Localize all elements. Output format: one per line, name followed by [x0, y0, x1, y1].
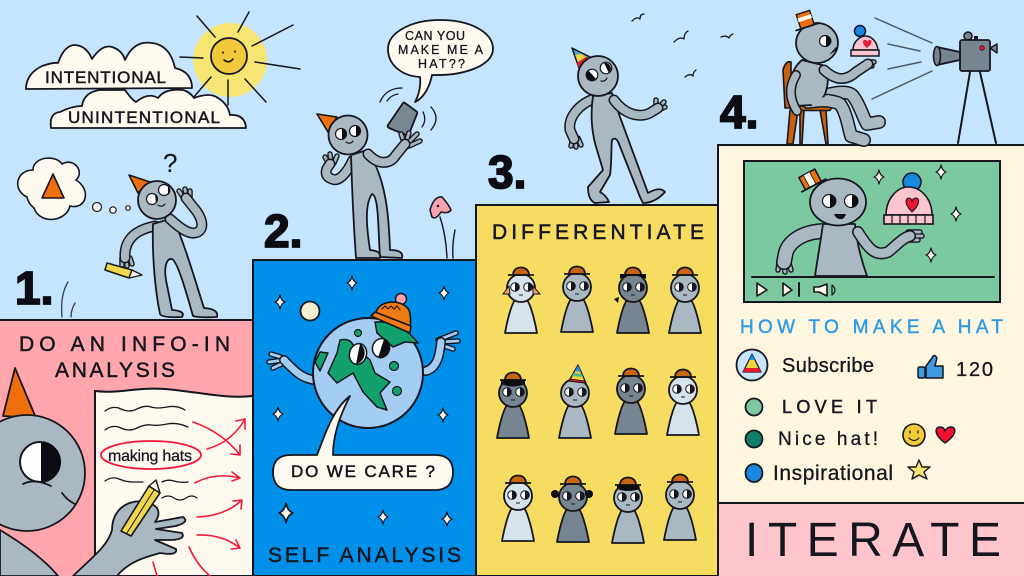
character: big head with cone hat — [0, 368, 85, 576]
speech bubble: can you make me a hat — [388, 20, 493, 102]
panel 1: info-in analysis — [0, 320, 253, 576]
cloud: intentional: INTENTIONAL — [45, 68, 166, 87]
subscribe row: Subscribe — [782, 355, 874, 377]
grass — [62, 282, 75, 317]
figure with rainbow party hat — [559, 365, 591, 438]
question mark: ? — [163, 148, 177, 178]
striped top hat — [795, 167, 826, 192]
red oval with making hats — [101, 441, 201, 469]
subscribe row — [736, 350, 993, 381]
speech bubble: do we care — [273, 396, 453, 490]
step number 1: 1. — [15, 262, 53, 314]
red oval with making hats: making hats — [108, 448, 192, 465]
thought cloud with triangle — [18, 158, 130, 219]
heading: do an info-in analysis: DO AN INFO-IN — [19, 333, 230, 356]
subscribe row: 120 — [956, 359, 993, 381]
rainbow party hat — [572, 48, 592, 68]
character 4: filming on chair — [783, 9, 879, 144]
paper with notes — [95, 389, 253, 576]
speech bubble: do we care: DO WE CARE ? — [291, 462, 435, 481]
comment: inspirational — [746, 460, 930, 485]
character 1: thinking with pencil — [105, 175, 217, 317]
filming rays — [872, 18, 932, 99]
video player screen — [744, 161, 1000, 302]
comment: inspirational: Inspirational — [773, 462, 893, 485]
presenter — [778, 167, 922, 276]
panel 3: differentiate — [476, 205, 718, 576]
icon: red heart — [936, 427, 955, 443]
icon: smiley — [903, 424, 925, 446]
earth globe — [313, 318, 423, 428]
far leg — [812, 92, 879, 124]
video title: HOW TO MAKE A HAT — [740, 317, 1003, 338]
character 2: on phone — [317, 88, 436, 258]
heading: differentiate: DIFFERENTIATE — [492, 221, 704, 244]
character: hand holding pencil — [73, 480, 185, 576]
moon — [300, 302, 320, 320]
wooden chair — [783, 62, 831, 144]
speech bubble: can you make me a hat: HAT?? — [418, 57, 465, 71]
panel 2: self analysis — [253, 260, 476, 576]
speech bubble: can you make me a hat: CAN YOU — [405, 29, 465, 43]
comment: love it: LOVE IT — [782, 397, 877, 417]
arm with beanie — [791, 26, 879, 111]
step number 2: 2. — [264, 205, 302, 257]
heading: do an info-in analysis — [19, 333, 230, 382]
phone with vibration lines — [380, 88, 436, 135]
group of hatted figures — [497, 266, 701, 543]
character 3: walking — [570, 48, 665, 203]
iterate banner: ITERATE — [745, 514, 1001, 567]
birds — [632, 14, 733, 77]
heading: do an info-in analysis: ANALYSIS — [55, 359, 175, 382]
step number 4: 4. — [720, 86, 758, 138]
iterate banner — [718, 503, 1024, 576]
striped top hat — [791, 9, 819, 30]
earth arms — [269, 333, 458, 380]
step number 3: 3. — [488, 146, 526, 198]
speech bubble: can you make me a hat: MAKE ME A — [398, 43, 484, 57]
head — [796, 23, 838, 63]
icon: yellow star — [908, 460, 930, 479]
panel 4: video card — [718, 145, 1024, 503]
cloud: intentional — [26, 43, 192, 89]
icon: thumbs up — [918, 356, 943, 378]
near leg — [808, 101, 864, 140]
pink beanie with heart — [884, 173, 933, 224]
comment: nice hat: Nice hat! — [778, 429, 878, 450]
earth orange beanie — [371, 294, 411, 333]
flower and grass — [430, 197, 455, 258]
torso — [790, 60, 828, 106]
sparkles — [874, 165, 961, 262]
sun — [180, 12, 300, 105]
video camera on tripod — [934, 32, 997, 143]
comment: nice hat — [746, 424, 955, 450]
player controls — [752, 277, 994, 296]
cloud: unintentional — [51, 90, 246, 128]
cloud: unintentional: UNINTENTIONAL — [68, 108, 220, 127]
heading: self analysis: SELF ANALYSIS — [268, 544, 461, 567]
pencil — [105, 263, 142, 278]
red arrows — [153, 419, 245, 576]
stars — [273, 276, 452, 526]
